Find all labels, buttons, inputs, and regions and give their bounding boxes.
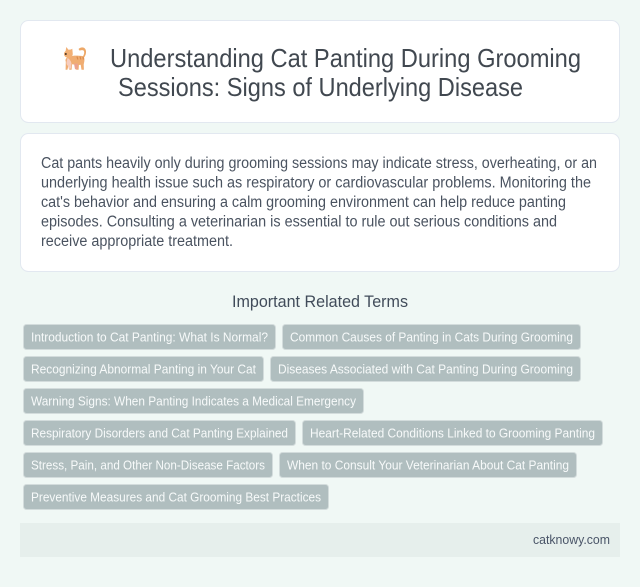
tag: Stress, Pain, and Other Non-Disease Factors [31, 457, 265, 472]
text block: summary: Cat pants heavily only during grooming sessions may indicate stress, overheating, or an [41, 155, 597, 172]
tag: Common Causes of Panting in Cats During Grooming [290, 329, 573, 344]
text block: summary: underlying health issue such as respiratory or cardiovascular problems. Monitoring the [41, 174, 591, 192]
tag: Warning Signs: When Panting Indicates a Medical Emergency [31, 393, 356, 408]
tag [24, 356, 264, 382]
tag list: related terms [24, 324, 602, 510]
tag: Introduction to Cat Panting: What Is Normal? [31, 329, 268, 344]
tag [280, 452, 576, 478]
footer bar [20, 523, 620, 557]
title: Understanding Cat Panting During Grooming [110, 43, 581, 73]
panel: title card [20, 20, 620, 122]
text block: summary [41, 155, 597, 250]
tag [24, 452, 272, 478]
icon: orange cat [64, 47, 86, 70]
title [110, 43, 581, 102]
tag: Recognizing Abnormal Panting in Your Cat [31, 361, 256, 376]
title: Sessions: Signs of Underlying Disease [118, 72, 523, 102]
text block: summary: episodes. Consulting a veterinarian is essential to rule out serious conditions and [41, 214, 557, 230]
tag [24, 388, 364, 414]
tag [270, 356, 580, 382]
text block: summary: cat's behavior and ensuring a calm grooming environment can help reduce panting [41, 194, 566, 211]
panel: summary text [20, 134, 620, 272]
tag: Heart-Related Conditions Linked to Grooming Panting [310, 425, 595, 440]
tag: Preventive Measures and Cat Grooming Best Practices [31, 489, 321, 504]
tag [302, 420, 602, 446]
footer text: site name: catknowy.com [533, 532, 610, 547]
tag [24, 324, 276, 350]
tag [24, 420, 296, 446]
tag: Respiratory Disorders and Cat Panting Explained [31, 425, 288, 440]
tag [282, 324, 580, 350]
heading: related terms: Important Related Terms [232, 293, 408, 311]
text block: summary: receive appropriate treatment. [41, 233, 233, 250]
tag [24, 484, 328, 510]
tag: When to Consult Your Veterinarian About Cat Panting [287, 457, 569, 472]
tag: Diseases Associated with Cat Panting During Grooming [278, 361, 573, 376]
